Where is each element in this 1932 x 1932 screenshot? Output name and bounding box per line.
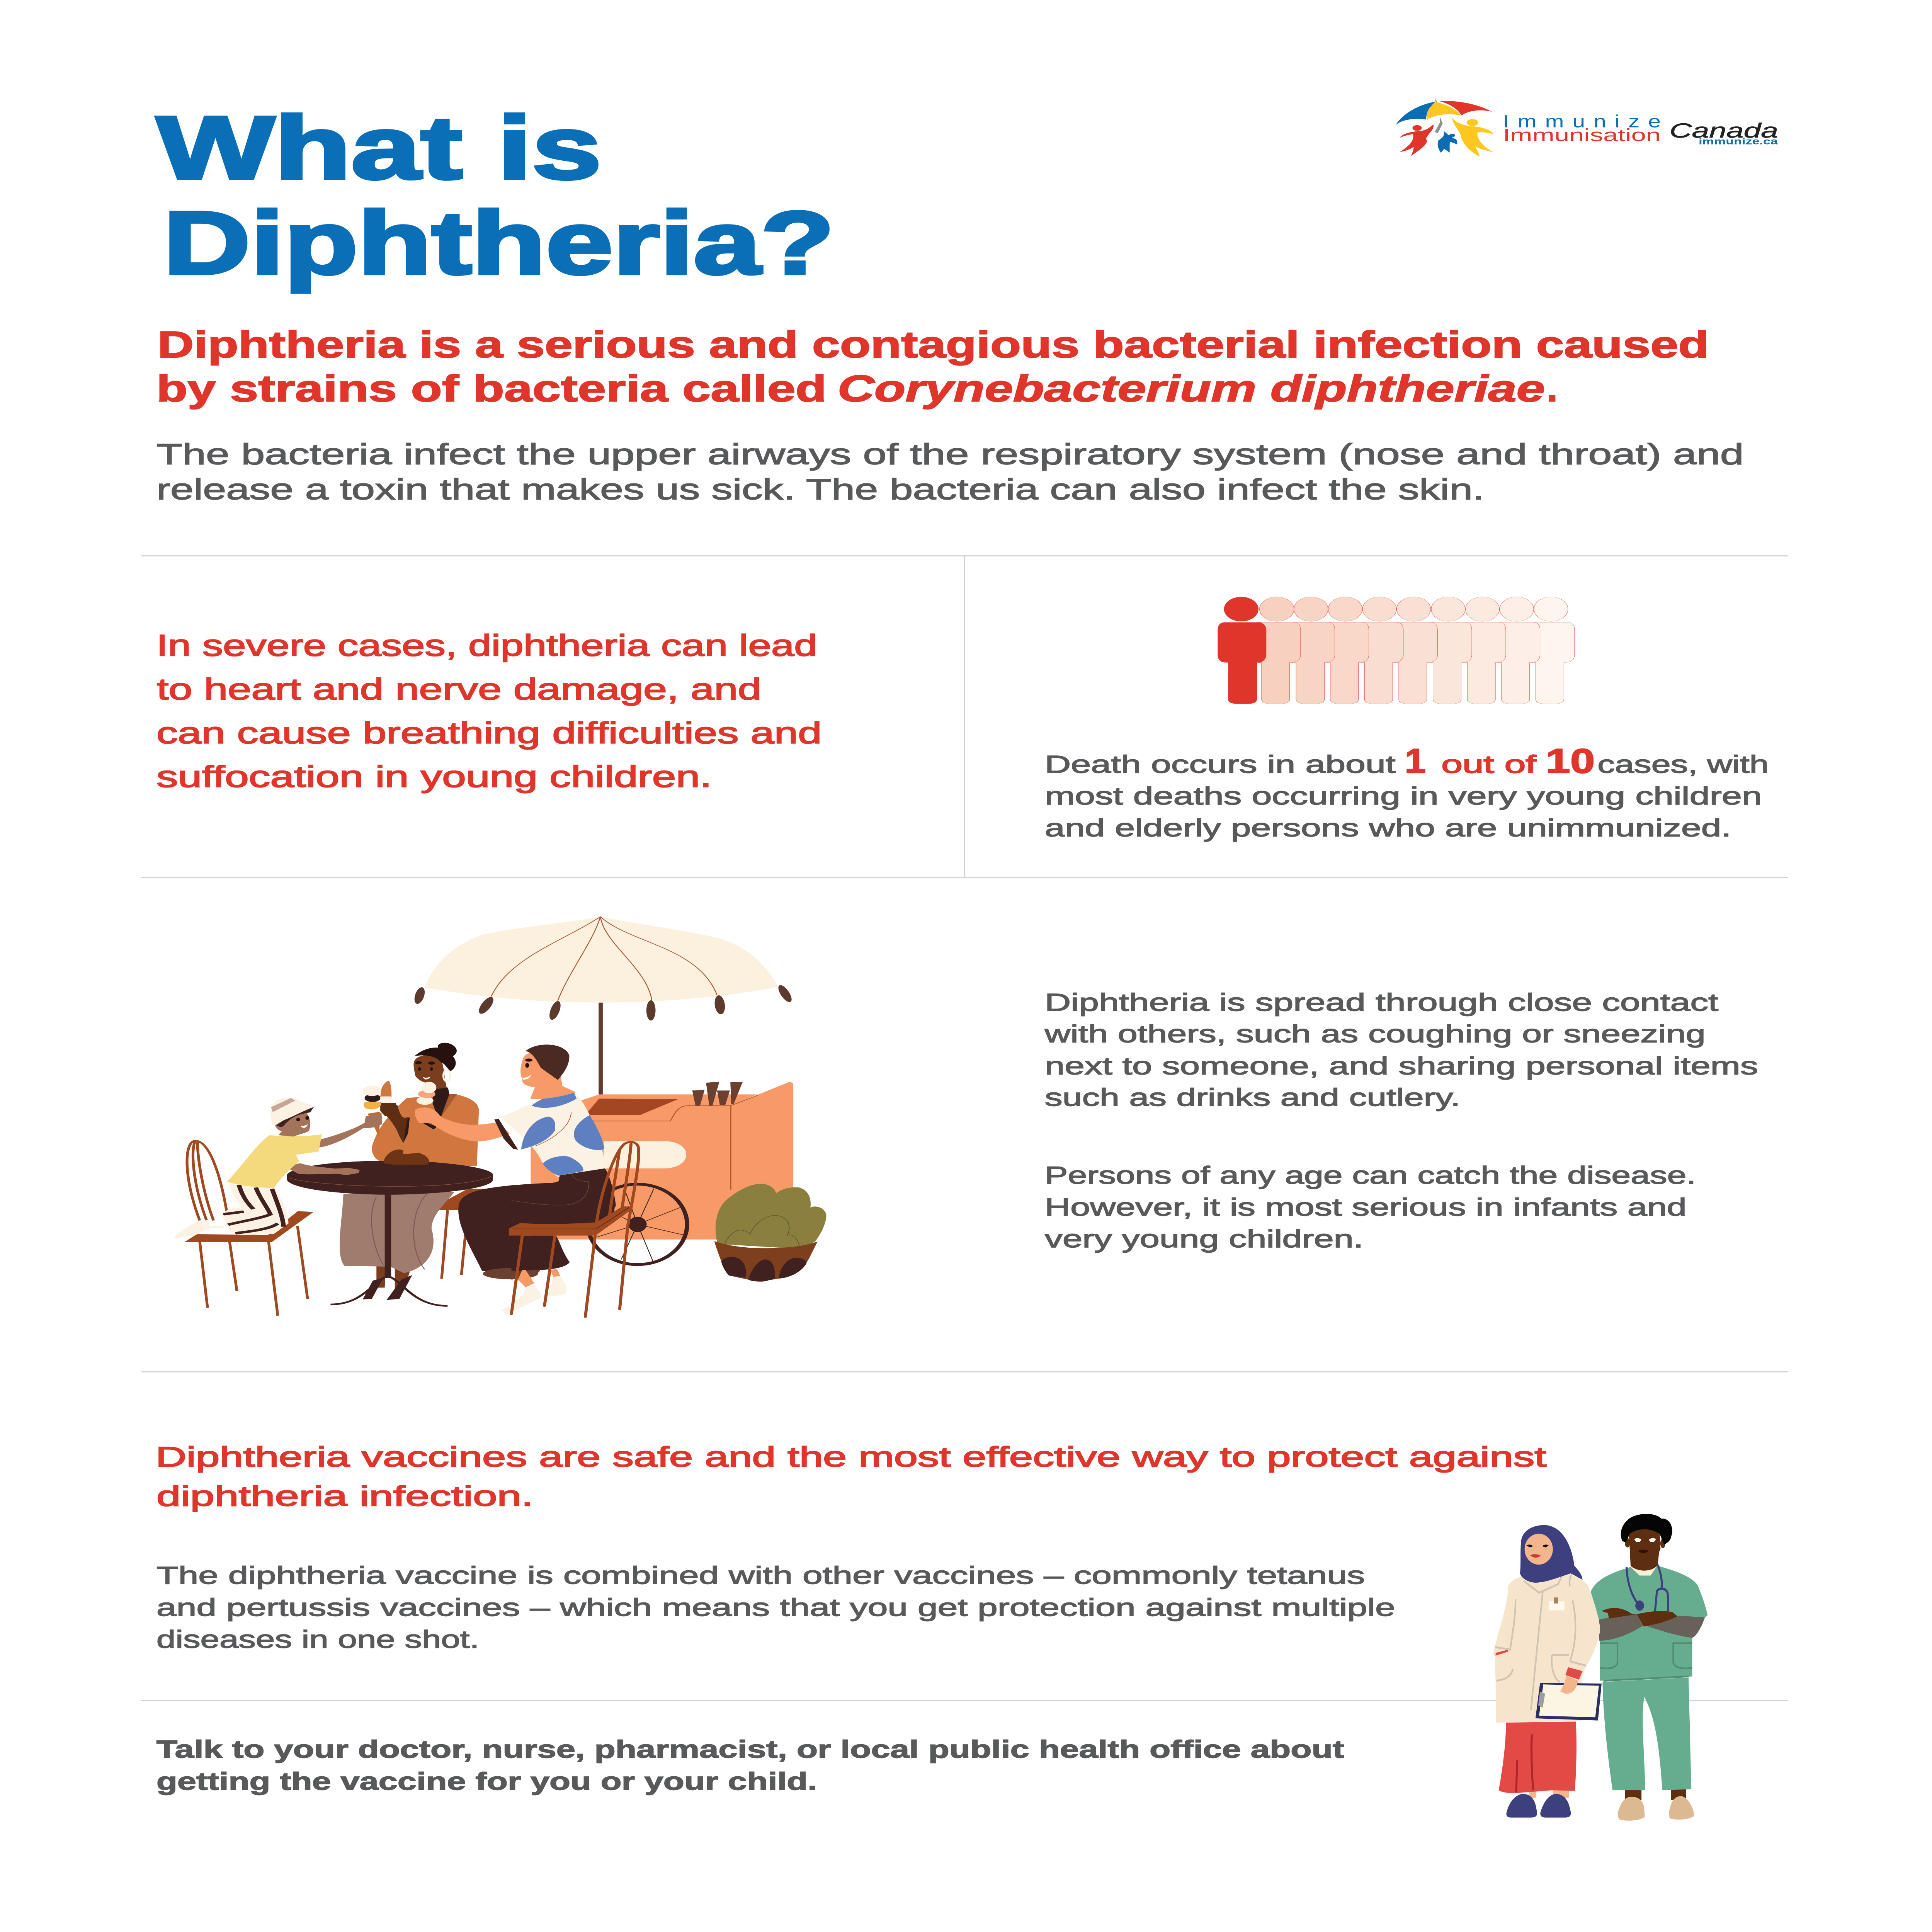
panel: death rate text: most deaths occurring in very young children	[1045, 782, 1762, 810]
man's chair	[509, 1142, 639, 1317]
plant	[714, 1184, 826, 1282]
panel: severe cases text: to heart and nerve damage, and	[157, 672, 762, 706]
ice cream cart	[531, 1082, 793, 1240]
panel: how it spreads text: very young children.	[1045, 1225, 1363, 1253]
panel: severe cases text: suffocation in young children.	[156, 760, 712, 794]
female doctor	[1493, 1525, 1602, 1818]
panel: death rate text	[1045, 742, 1769, 842]
panel: vaccine body text	[156, 1561, 1395, 1653]
panel: vaccine heading	[156, 1441, 1546, 1512]
panel: vaccine heading: Diphtheria vaccines are safe and the most effective way to protect against	[156, 1441, 1546, 1473]
illustration: family eating ice cream at a cart	[175, 917, 826, 1317]
panel: how it spreads text: such as drinks and cutlery.	[1045, 1083, 1460, 1111]
wheel	[588, 1184, 687, 1265]
logo: Immunize Canada	[1396, 99, 1778, 157]
woman	[340, 1043, 479, 1300]
logo: Immunize Canada: Canada	[1670, 119, 1778, 142]
male nurse	[1591, 1514, 1708, 1821]
logo: Immunize Canada: Immunisation	[1503, 126, 1661, 145]
child's chair	[187, 1141, 311, 1316]
title: Diphtheria?	[163, 193, 835, 293]
woman's hand on table	[384, 1150, 429, 1165]
illustration: two health care workers	[1493, 1514, 1708, 1821]
title	[156, 98, 835, 293]
panel: how it spreads text: with others, such as coughing or sneezing	[1044, 1020, 1706, 1048]
panel: severe cases text	[156, 629, 821, 794]
logo: Immunize Canada: Immunize	[1503, 112, 1661, 131]
subheading: Diphtheria is a serious and contagious bacterial infection caused	[158, 323, 1709, 366]
subheading	[156, 323, 1709, 409]
intro text: release a toxin that makes us sick. The bacteria can also infect the skin.	[156, 473, 1484, 506]
call to action: getting the vaccine for you or your child.	[156, 1767, 817, 1795]
panel: how it spreads text: However, it is most serious in infants and	[1045, 1193, 1687, 1221]
panel: death rate text: cases, with	[1597, 750, 1769, 778]
panel: how it spreads text: Persons of any age can catch the disease.	[1045, 1162, 1696, 1189]
panel: death rate text: 10	[1546, 742, 1595, 780]
intro text	[156, 438, 1744, 506]
panel: death rate text: and elderly persons who are unimmunized.	[1045, 814, 1731, 842]
panel: death rate text: 1	[1405, 742, 1426, 780]
call to action: Talk to your doctor, nurse, pharmacist, or local public health office about	[156, 1735, 1344, 1763]
intro text: The bacteria infect the upper airways of the respiratory system (nose and throat) and	[156, 438, 1744, 471]
panel: how it spreads text: next to someone, and sharing personal items	[1045, 1052, 1758, 1080]
ice cream cones	[363, 1081, 436, 1137]
panel: how it spreads text: Diphtheria is spread through close contact	[1045, 988, 1718, 1016]
child	[175, 1098, 382, 1238]
panel: severe cases text: can cause breathing difficulties and	[156, 716, 821, 750]
icon: ten people pictogram	[1218, 597, 1575, 704]
panel: vaccine heading: diphtheria infection.	[156, 1480, 533, 1512]
panel: vaccine body text: The diphtheria vaccine is combined with other vaccines – commonly tetanus	[156, 1561, 1365, 1589]
umbrella	[413, 917, 794, 1096]
panel: vaccine body text: and pertussis vaccines – which means that you get protection against multiple	[156, 1594, 1395, 1621]
panel: severe cases text: In severe cases, diphtheria can lead	[156, 629, 817, 662]
subheading: by strains of bacteria called	[156, 367, 827, 409]
title: What is	[156, 98, 602, 197]
logo: Immunize Canada: immunize.ca	[1699, 136, 1778, 146]
panel: death rate text: Death occurs in about	[1045, 750, 1396, 778]
subheading: .	[1546, 367, 1558, 409]
call to action	[156, 1735, 1344, 1795]
man	[415, 1044, 616, 1314]
panel: vaccine body text: diseases in one shot.	[156, 1625, 479, 1653]
table	[287, 1161, 493, 1306]
woman's chair	[432, 1190, 482, 1279]
panel: how it spreads text	[1044, 988, 1758, 1253]
panel: death rate text: out of	[1441, 750, 1536, 778]
subheading: Corynebacterium diphtheriae	[838, 367, 1545, 409]
